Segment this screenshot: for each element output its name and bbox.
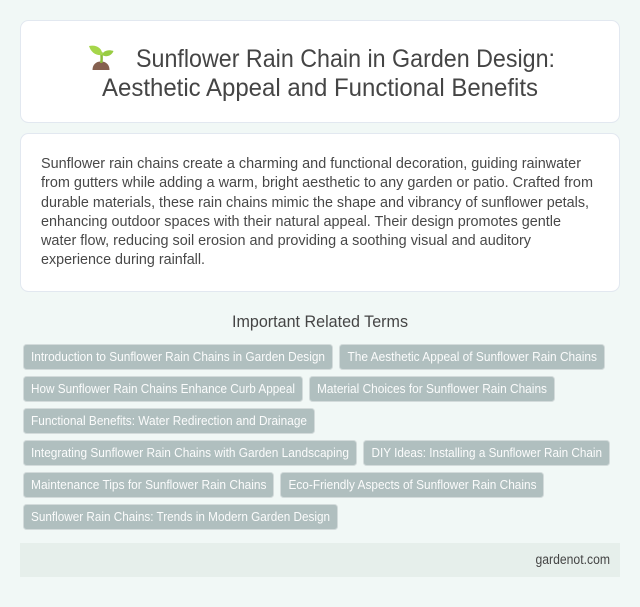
tag: eco-friendly: Eco-Friendly Aspects of Sunflower Rain Chains xyxy=(288,477,536,492)
description text: water flow, reducing soil erosion and providing a soothing visual and auditory xyxy=(40,233,532,249)
footer xyxy=(20,543,620,577)
title text: Sunflower Rain Chain in Garden Design: xyxy=(136,45,555,73)
tag: introduction xyxy=(24,344,332,370)
description text: Sunflower rain chains create a charming and functional decoration, guiding rainwater xyxy=(41,156,581,172)
tag: eco-friendly xyxy=(280,472,544,498)
tag: aesthetic appeal xyxy=(340,344,604,370)
tag: landscaping xyxy=(24,440,356,466)
panel: description xyxy=(20,134,620,292)
tag: introduction: Introduction to Sunflower Rain Chains in Garden Design xyxy=(31,349,325,364)
tag list xyxy=(24,344,610,530)
description text: from gutters while adding a warm, bright aesthetic to any garden or patio. Crafted from xyxy=(41,175,593,191)
tag: maintenance tips xyxy=(24,472,274,498)
tag: trends: Sunflower Rain Chains: Trends in Modern Garden Design xyxy=(31,509,330,524)
tag: functional benefits xyxy=(24,408,314,434)
tag: curb appeal xyxy=(24,376,302,402)
footer: gardenot.com xyxy=(536,552,610,567)
tag: material choices: Material Choices for Sunflower Rain Chains xyxy=(317,381,547,396)
description text: durable materials, these rain chains mimic the shape and vibrancy of sunflower petals, xyxy=(41,195,589,211)
tag: maintenance tips: Maintenance Tips for Sunflower Rain Chains xyxy=(31,477,266,492)
tag: landscaping: Integrating Sunflower Rain Chains with Garden Landscaping xyxy=(31,445,349,460)
description text: enhancing outdoor spaces with their natural appeal. Their design promotes gentle xyxy=(41,214,561,230)
icon: seedling xyxy=(89,46,114,70)
heading: important related terms: Important Related Terms xyxy=(232,313,408,331)
title text xyxy=(102,45,555,102)
tag: functional benefits: Functional Benefits: Water Redirection and Drainage xyxy=(31,413,307,428)
tag: material choices xyxy=(310,376,554,402)
tag: curb appeal: How Sunflower Rain Chains Enhance Curb Appeal xyxy=(31,381,295,396)
tag: diy ideas xyxy=(364,440,610,466)
tag: aesthetic appeal: The Aesthetic Appeal of Sunflower Rain Chains xyxy=(348,349,597,364)
description text xyxy=(40,156,593,268)
title text: Aesthetic Appeal and Functional Benefits xyxy=(102,74,538,102)
panel: title header xyxy=(20,20,620,122)
tag: diy ideas: DIY Ideas: Installing a Sunflower Rain Chain xyxy=(372,445,602,460)
tag: trends xyxy=(24,504,338,530)
description text: experience during rainfall. xyxy=(41,252,205,268)
